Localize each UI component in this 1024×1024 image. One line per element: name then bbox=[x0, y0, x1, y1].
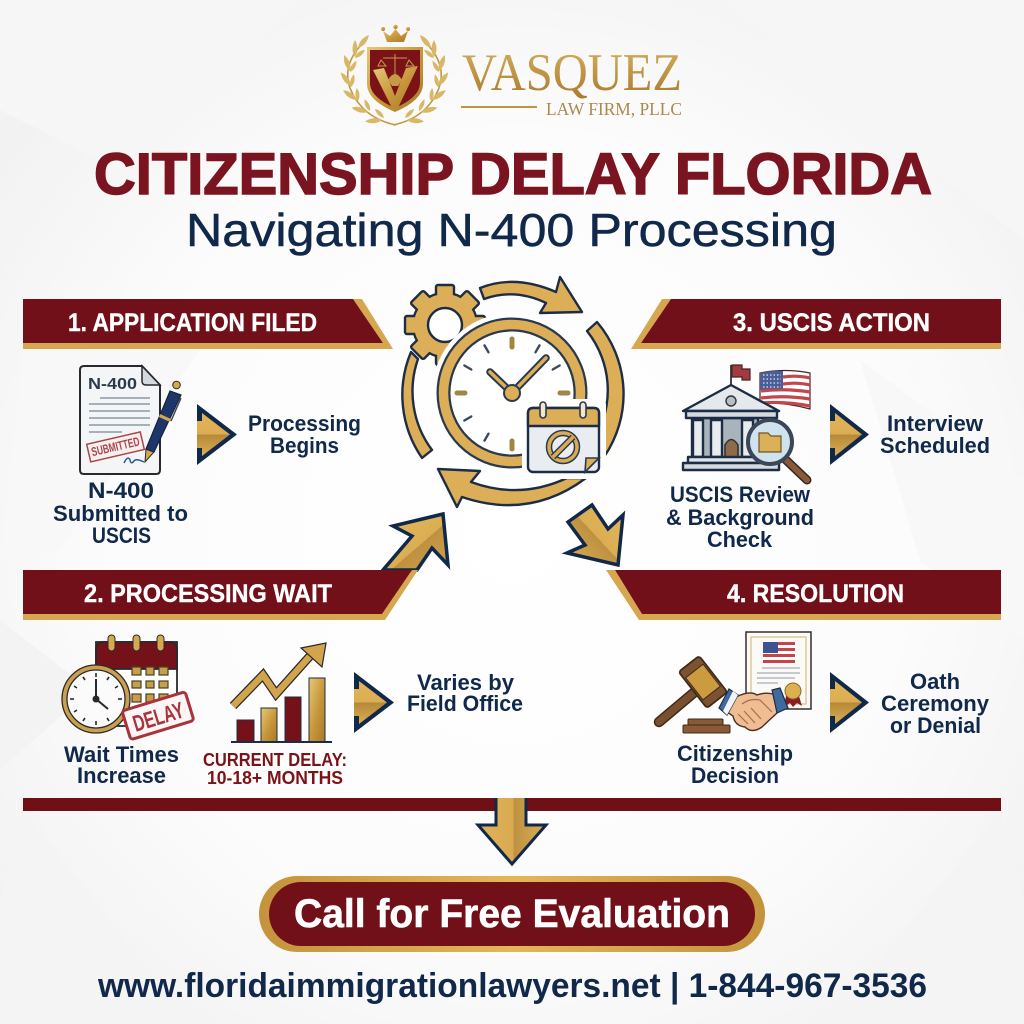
callout: current delay: 10-18+ MONTHS bbox=[207, 768, 343, 788]
bar chart: rising delay bbox=[231, 643, 332, 742]
icon: gavel bbox=[659, 656, 730, 733]
panel: step 3 bbox=[666, 365, 990, 552]
icon: pen bbox=[145, 381, 181, 462]
icon: N-400 document: SUBMITTED bbox=[90, 435, 141, 459]
label: Varies by Field Office: Varies by bbox=[417, 670, 514, 695]
icon: delay stamp bbox=[122, 692, 194, 740]
call to action button bbox=[259, 876, 765, 952]
icon: clock bbox=[432, 313, 592, 473]
label: Citizenship Decision: Citizenship bbox=[677, 741, 793, 766]
label: Oath Ceremony or Denial: or Denial bbox=[890, 713, 981, 738]
label: USCIS Review & Background Check: USCIS Review bbox=[670, 482, 810, 507]
label: N-400 Submitted to USCIS: N-400 bbox=[88, 478, 154, 503]
arrow: down to call to action bbox=[478, 798, 546, 864]
central arrow: up into cycle bbox=[383, 514, 448, 570]
icon: laurel wreath bbox=[339, 33, 450, 125]
panel: step 4 bbox=[659, 632, 995, 788]
title: CITIZENSHIP DELAY FLORIDA bbox=[94, 142, 932, 207]
divider bar bbox=[23, 798, 1001, 811]
subtitle: Navigating N-400 Processing bbox=[186, 204, 837, 256]
callout: current delay: CURRENT DELAY: bbox=[203, 750, 347, 770]
icon: clock bbox=[62, 665, 130, 733]
label: Wait Times Increase: Wait Times bbox=[64, 742, 179, 767]
arrow: to Processing Begins bbox=[197, 404, 237, 465]
banner: 4. Resolution: 4. RESOLUTION bbox=[727, 580, 904, 608]
panel: step 2 bbox=[62, 635, 523, 788]
contact line: www.floridaimmigrationlawyers.net | 1-844-967-3536 bbox=[97, 967, 927, 1005]
label: Oath Ceremony or Denial: Oath bbox=[910, 669, 960, 694]
icon: delay stamp: DELAY bbox=[130, 697, 187, 737]
label: Interview Scheduled: Interview bbox=[887, 411, 983, 436]
call to action button: Call for Free Evaluation bbox=[294, 892, 730, 936]
cycle arrow: top bbox=[480, 277, 582, 313]
logo wordmark: VASQUEZ bbox=[462, 44, 682, 102]
logo tagline: LAW FIRM, PLLC bbox=[546, 99, 682, 119]
label: Varies by Field Office: Field Office bbox=[407, 691, 523, 716]
icon: American flag bbox=[760, 370, 810, 409]
panel: step 1 bbox=[53, 366, 367, 548]
label: Interview Scheduled: Scheduled bbox=[880, 433, 990, 458]
icon: citizenship certificate bbox=[746, 632, 811, 709]
label: Processing Begins: Begins bbox=[270, 433, 339, 458]
banner: 3. USCIS Action: 3. USCIS ACTION bbox=[733, 309, 930, 337]
label: Wait Times Increase: Increase bbox=[77, 763, 166, 788]
banner: 1. Application Filed bbox=[23, 299, 393, 349]
icon: government building bbox=[683, 385, 779, 470]
label: N-400 Submitted to USCIS: Submitted to bbox=[53, 501, 188, 526]
icon: gear bbox=[405, 285, 485, 365]
icon: crown bbox=[381, 25, 410, 42]
icon: handshake bbox=[719, 688, 788, 730]
label: Processing Begins: Processing bbox=[248, 411, 361, 436]
icon: calendar bbox=[96, 635, 177, 726]
label: Citizenship Decision: Decision bbox=[691, 763, 779, 788]
label: USCIS Review & Background Check: Check bbox=[707, 527, 772, 552]
arrow: to Varies by Field Office bbox=[354, 672, 394, 733]
central arrow: down out of cycle bbox=[567, 505, 623, 565]
logo: Vasquez Law Firm bbox=[339, 25, 682, 125]
cycle arrow: right arc bbox=[587, 322, 624, 457]
icon: N-400 document bbox=[80, 366, 160, 474]
cycle arrow: left arc bbox=[402, 352, 432, 458]
icon: flag pole and red flag bbox=[731, 365, 750, 386]
arrow: to Interview Scheduled bbox=[830, 404, 869, 465]
icon: magnifying glass with folder bbox=[748, 420, 807, 480]
banner: 2. Processing Wait bbox=[23, 570, 418, 620]
label: USCIS Review & Background Check: & Background bbox=[666, 505, 814, 530]
label: N-400 Submitted to USCIS: USCIS bbox=[92, 523, 151, 548]
central icon: clock cycle bbox=[402, 277, 624, 507]
cycle arrow: bottom bbox=[438, 469, 586, 507]
icon: calendar with prohibition sign bbox=[522, 399, 606, 479]
banner: 4. Resolution bbox=[606, 570, 1001, 620]
icon: N-400 document: N-400 bbox=[88, 376, 137, 393]
banner: 1. Application Filed: 1. APPLICATION FILED bbox=[68, 309, 317, 337]
label: Oath Ceremony or Denial: Ceremony bbox=[881, 691, 989, 716]
banner: 3. USCIS Action bbox=[631, 299, 1001, 349]
banner: 2. Processing Wait: 2. PROCESSING WAIT bbox=[84, 580, 332, 608]
icon: shield bbox=[367, 47, 423, 112]
arrow: to Oath Ceremony or Denial bbox=[830, 672, 869, 733]
